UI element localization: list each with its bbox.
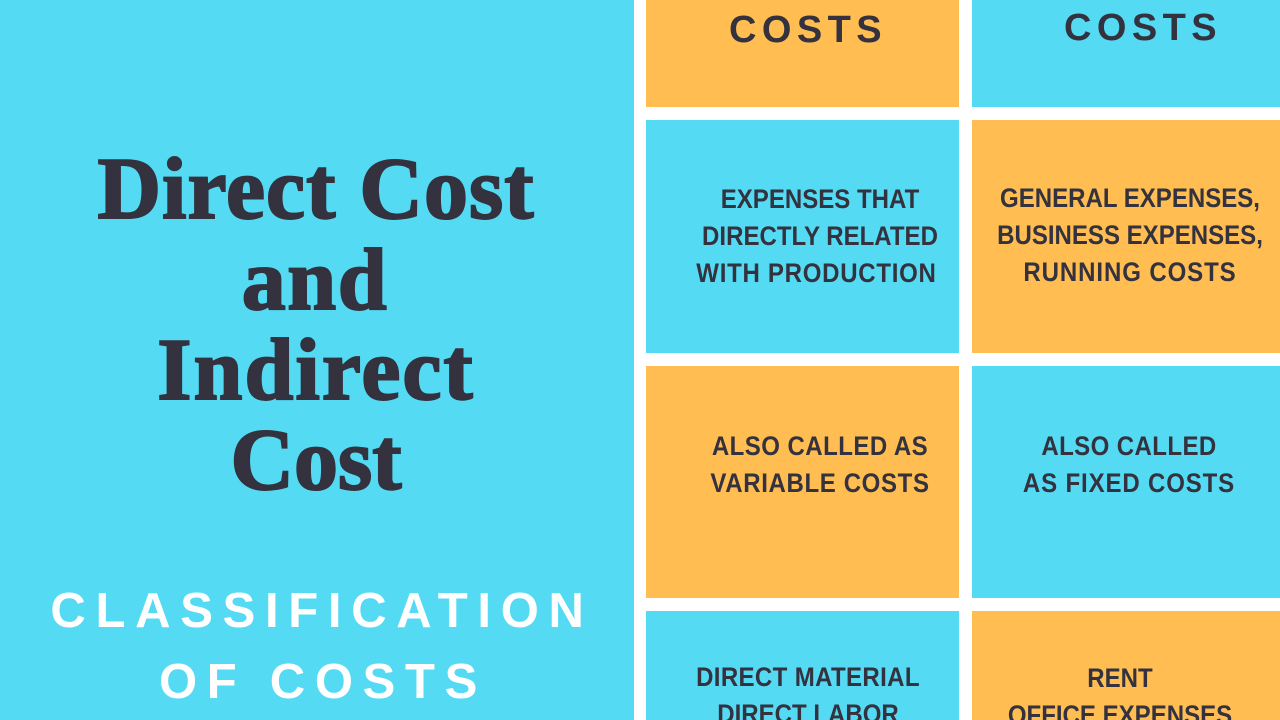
cell: direct definition — [646, 120, 959, 353]
text: WITH PRODUCTION — [696, 258, 937, 288]
text — [710, 431, 930, 498]
text — [997, 183, 1263, 287]
cell: indirect definition — [972, 120, 1280, 353]
text: VARIABLE COSTS — [710, 468, 930, 498]
header cell: direct costs — [646, 0, 959, 107]
title: Direct Cost: Direct Cost — [98, 141, 534, 238]
header cell: indirect costs — [972, 0, 1280, 107]
text — [1008, 663, 1232, 720]
text: GENERAL EXPENSES, — [1000, 183, 1260, 213]
cell: variable costs — [646, 366, 959, 598]
text — [696, 662, 920, 720]
text: ALSO CALLED AS — [712, 431, 928, 461]
text: DIRECTLY RELATED — [702, 221, 938, 251]
heading: COSTS — [1064, 7, 1222, 49]
cell: fixed costs — [972, 366, 1280, 598]
title: Indirect: Indirect — [157, 322, 475, 419]
text: RUNNING COSTS — [1023, 257, 1237, 287]
cell: indirect examples — [972, 611, 1280, 720]
text: EXPENSES THAT — [721, 184, 919, 214]
text: AS FIXED COSTS — [1023, 468, 1235, 498]
text: DIRECT MATERIAL — [696, 662, 920, 692]
cell: direct examples — [646, 611, 959, 720]
heading: COSTS — [729, 9, 887, 51]
title: and: and — [242, 232, 388, 329]
panel: left title panel — [0, 0, 634, 720]
text — [1023, 431, 1235, 498]
text: BUSINESS EXPENSES, — [997, 220, 1263, 250]
subtitle: of costs: OF COSTS — [159, 655, 487, 709]
text — [696, 184, 938, 288]
title: Cost: Cost — [230, 412, 402, 509]
subtitle: classification: CLASSIFICATION — [50, 584, 594, 638]
text: RENT — [1087, 663, 1153, 693]
text: ALSO CALLED — [1041, 431, 1217, 461]
